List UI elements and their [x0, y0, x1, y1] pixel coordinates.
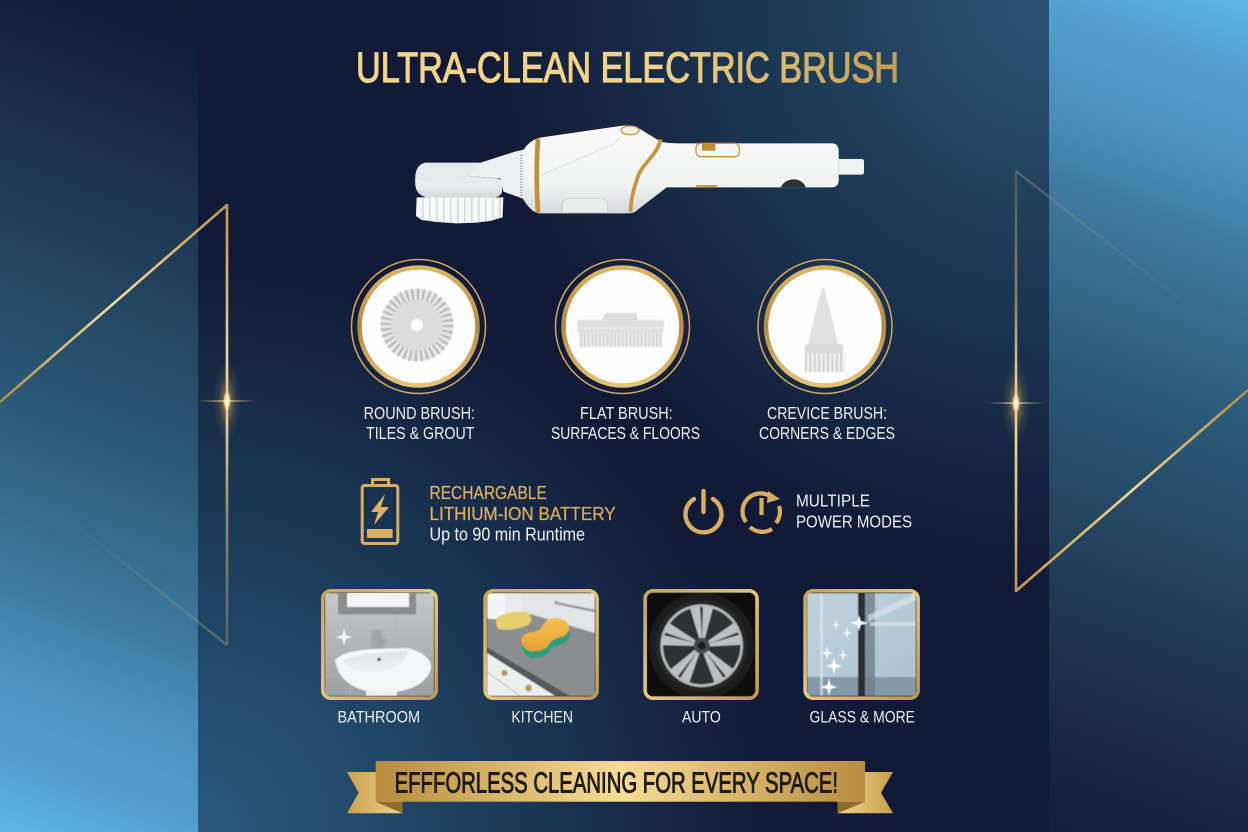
background: left panel: [0, 0, 198, 832]
panel seam: [540, 137, 620, 176]
gold trim left: [537, 139, 538, 213]
label: crevice brush: CORNERS & EDGES: [759, 423, 895, 443]
background: center panel: [198, 0, 1049, 832]
title: ULTRA-CLEAN ELECTRIC BRUSH: [356, 44, 899, 92]
neck: [468, 149, 525, 199]
ribbon main band: [376, 761, 865, 802]
text: battery features: [430, 482, 616, 544]
gold switch: [696, 143, 739, 157]
label: kitchen: KITCHEN: [511, 708, 573, 726]
nozzle: [839, 159, 864, 175]
flat brush head: [578, 313, 664, 347]
banner text: EFFFORLESS CLEANING FOR EVERY SPACE!: [395, 767, 838, 799]
ring gold and white disc: [564, 268, 682, 386]
ring gold and white disc: [360, 268, 478, 386]
label: crevice brush: [759, 403, 895, 443]
label: round brush: ROUND BRUSH:: [364, 403, 475, 423]
small gold button: [696, 185, 717, 188]
label: auto: AUTO: [682, 708, 721, 726]
text: battery features: Up to 90 min Runtime: [430, 524, 585, 544]
gold trim right: [631, 139, 661, 212]
label: round brush: TILES & GROUT: [366, 423, 475, 443]
text: battery features: LITHIUM-ION BATTERY: [430, 503, 616, 524]
round brush head: [380, 288, 454, 362]
attachment: crevice brush: [758, 260, 892, 394]
photo: bathroom sink: [323, 590, 436, 698]
label: bathroom: BATHROOM: [338, 708, 420, 726]
label: flat brush: [551, 403, 700, 443]
ribbon fold left: [376, 802, 402, 813]
crevice brush head: [804, 288, 845, 372]
text: multiple power modes: MULTIPLE: [796, 490, 870, 510]
label: flat brush: FLAT BRUSH:: [580, 403, 673, 423]
brush head: [415, 163, 502, 198]
icon: power mode cycle: [743, 491, 780, 532]
decorative gold triangle left: [0, 204, 256, 645]
photo: glass window: [805, 591, 918, 698]
serrated collar: [518, 155, 524, 197]
text: multiple power modes: [796, 490, 912, 532]
photo: kitchen sponges: [485, 591, 597, 698]
label: crevice brush: CREVICE BRUSH:: [767, 403, 887, 423]
label: round brush: [364, 403, 475, 443]
ribbon fold right: [838, 802, 865, 813]
ribbon tail right: [838, 772, 893, 813]
ring outer: [352, 260, 486, 394]
product: electric brush: [415, 125, 864, 223]
decorative gold triangle right: [988, 171, 1248, 592]
background: right panel: [1049, 0, 1248, 832]
bottom latch: [563, 199, 607, 213]
dark notch: [781, 179, 806, 187]
ring outer: [758, 260, 892, 394]
attachment: flat brush: [556, 260, 690, 394]
icon: battery: [362, 480, 398, 544]
bristles: [415, 197, 505, 223]
text: multiple power modes: POWER MODES: [796, 512, 912, 532]
attachment: round brush: [352, 260, 486, 394]
ring outer: [556, 260, 690, 394]
text: battery features: RECHARGABLE: [430, 482, 547, 503]
icon: power button: [686, 491, 722, 532]
label: flat brush: SURFACES & FLOORS: [551, 423, 700, 443]
main body: [523, 125, 839, 213]
gold logo badge: [621, 126, 639, 135]
banner ribbon: [347, 761, 893, 813]
ring gold and white disc: [766, 268, 884, 386]
photo: car wheel: [645, 591, 757, 699]
label: glass and more: GLASS & MORE: [810, 708, 915, 726]
ribbon tail left: [347, 772, 402, 813]
